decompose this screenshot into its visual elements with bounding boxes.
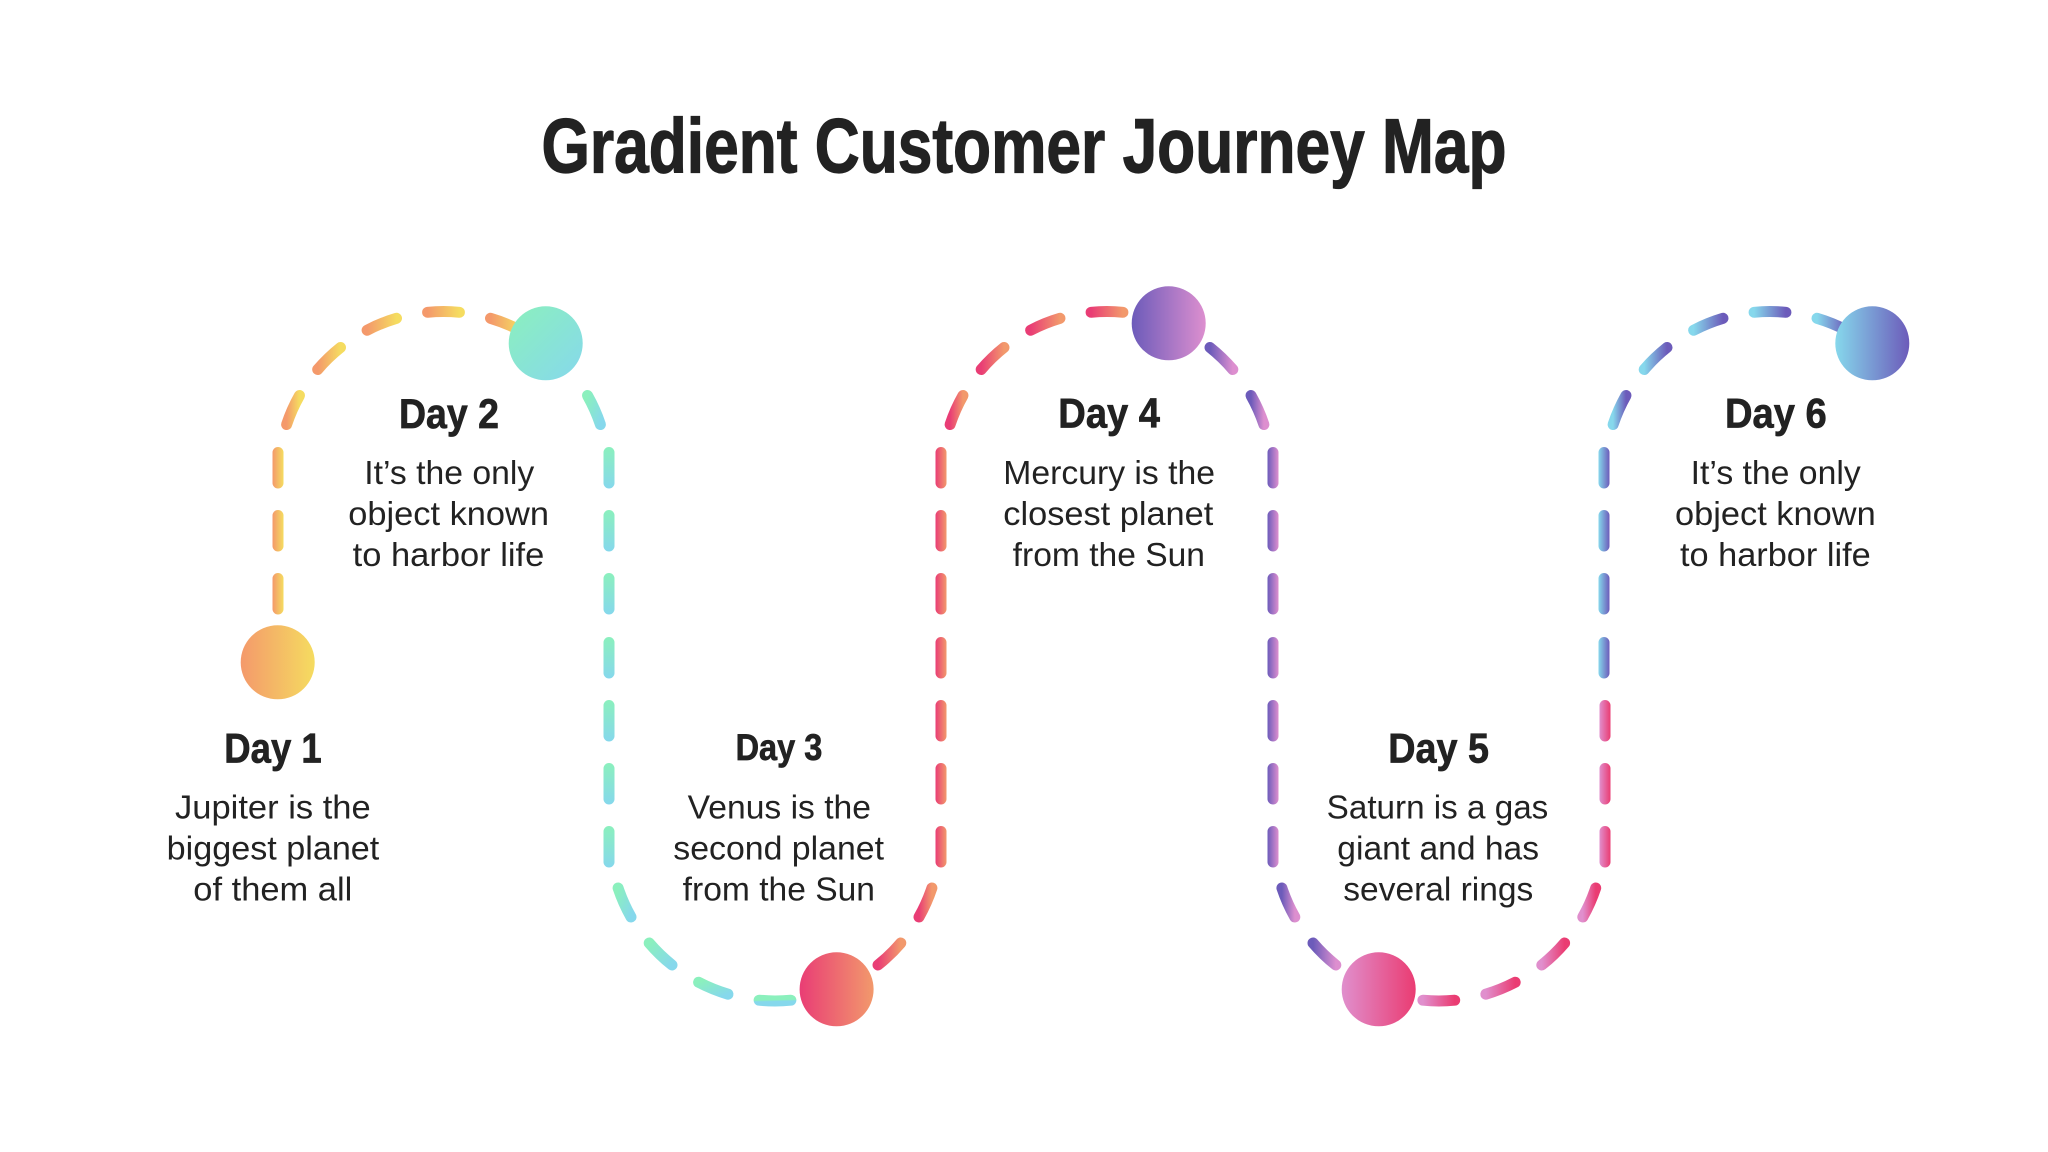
text block: Day 4: from the Sun	[1013, 536, 1205, 573]
text block: Day 4	[1003, 390, 1215, 573]
text block: Day 6: It’s the only	[1691, 454, 1861, 491]
dashed path: Day 3 to Day 4	[878, 312, 1123, 965]
text block: Day 2	[348, 390, 549, 573]
text block: Day 2: to harbor life	[353, 536, 544, 573]
text block: Day 4: closest planet	[1003, 495, 1213, 532]
text block: Day 3	[673, 727, 884, 907]
marker: Day 5	[1342, 952, 1416, 1026]
text block: Day 4: Day 4	[1058, 390, 1161, 436]
text block: Day 6: object known	[1675, 495, 1876, 532]
text block: Day 3: Venus is the	[688, 788, 871, 825]
marker: Day 4	[1132, 286, 1206, 360]
text block: Day 5: several rings	[1343, 870, 1533, 907]
marker: Day 1	[241, 625, 315, 699]
text block: Day 3: from the Sun	[683, 870, 875, 907]
text block: Day 6	[1675, 390, 1876, 573]
text block: Day 5: Saturn is a gas	[1327, 788, 1548, 825]
dashed path: Day 4 to Day 5	[1210, 348, 1336, 965]
dashed path: Day 5 to Day 6 (pink section)	[1423, 700, 1610, 1001]
text block: Day 2: It’s the only	[364, 454, 535, 491]
text block: Day 1: Day 1	[224, 724, 322, 771]
text block: Day 1: of them all	[193, 870, 352, 907]
text block: Day 2: Day 2	[399, 390, 499, 437]
dashed path: Day 1 to Day 2	[272, 312, 566, 614]
text block: Day 4: Mercury is the	[1003, 454, 1215, 491]
dashed path: Day 5 to Day 6 (blue section)	[1598, 312, 1846, 678]
text block: Day 5	[1327, 724, 1548, 907]
title: Gradient Customer Journey Map	[542, 104, 1506, 190]
text block: Day 6: to harbor life	[1680, 536, 1871, 573]
text block: Day 1: Jupiter is the	[175, 788, 371, 825]
text block: Day 6: Day 6	[1725, 390, 1827, 437]
marker: Day 2	[509, 306, 583, 380]
text block: Day 1	[167, 724, 379, 907]
dashed path: Day 2 to Day 3	[588, 396, 791, 1001]
marker: Day 3	[800, 952, 874, 1026]
text block: Day 3: second planet	[673, 829, 884, 866]
text block: Day 1: biggest planet	[167, 829, 379, 866]
text block: Day 5: giant and has	[1337, 829, 1539, 866]
marker: Day 6	[1835, 306, 1909, 380]
text block: Day 2: object known	[348, 495, 549, 532]
text block: Day 5: Day 5	[1388, 724, 1489, 771]
text block: Day 3: Day 3	[736, 727, 822, 768]
